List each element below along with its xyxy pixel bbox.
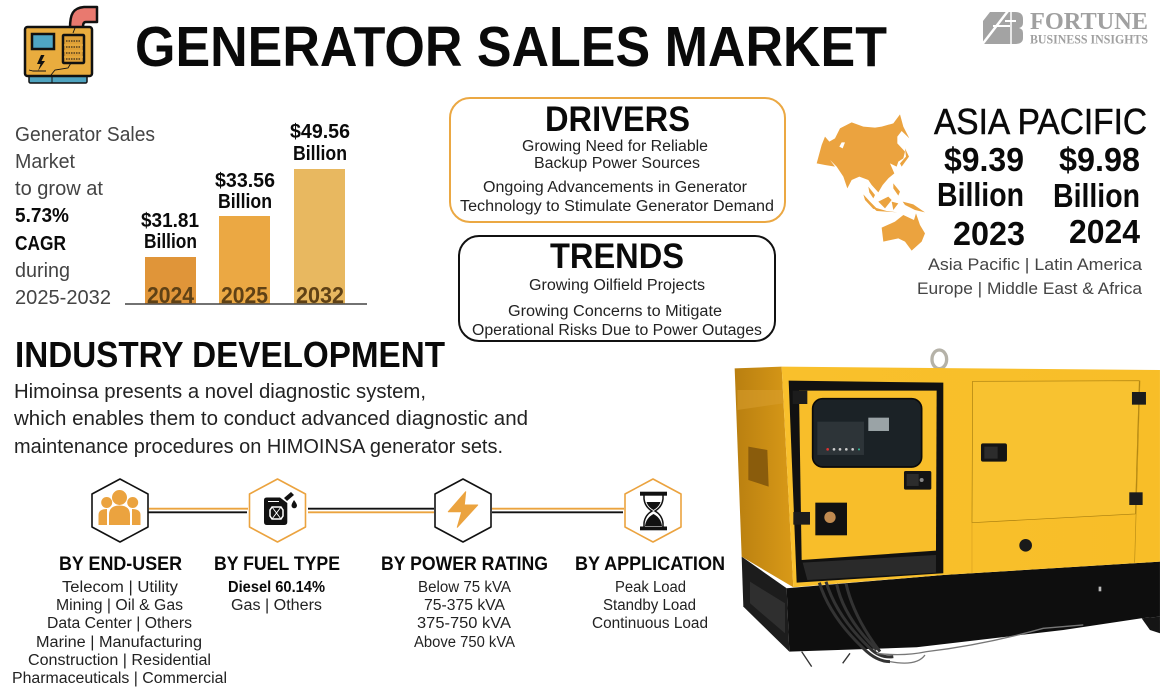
segment: by fuel type: Gas | Others <box>231 597 322 614</box>
bar: 2024 <box>141 210 199 308</box>
logo: Fortune Business Insights: FORTUNE <box>1030 8 1148 35</box>
panel: drivers: Technology to Stimulate Generator Demand <box>460 198 774 215</box>
connector lines <box>148 509 624 512</box>
segment: by application: BY APPLICATION <box>575 553 725 575</box>
panel: Asia Pacific values <box>917 101 1147 298</box>
panel: drivers: DRIVERS <box>545 100 690 139</box>
value: 2024: $9.98 <box>1059 141 1140 178</box>
segment: by end-user: BY END-USER <box>59 553 182 575</box>
text: CAGR statement: 2025-2032 <box>15 287 111 309</box>
segment: by power rating <box>381 553 548 651</box>
panel: trends <box>459 236 775 341</box>
panel: trends: Growing Oilfield Projects <box>529 277 705 294</box>
segment: by end-user: Telecom | Utility <box>62 579 178 596</box>
segment: by end-user: Data Center | Others <box>47 615 192 632</box>
icon: fuel can <box>250 479 306 542</box>
icon: hourglass <box>625 479 681 542</box>
value: 2024 <box>1053 141 1141 250</box>
heading: industry development: INDUSTRY DEVELOPMENT <box>15 334 445 375</box>
text: CAGR statement: during <box>15 260 70 282</box>
text: CAGR statement: CAGR <box>15 233 66 255</box>
text: industry development: Himoinsa presents a novel diagnostic system, <box>14 381 426 403</box>
photo: yellow generator set <box>735 350 1160 667</box>
segment: by end-user: Mining | Oil & Gas <box>56 597 183 614</box>
text: industry development: which enables them to conduct advanced diagnostic and <box>13 408 528 430</box>
segment: by end-user <box>12 553 227 687</box>
text: industry development <box>13 381 528 458</box>
value: 2023 <box>937 141 1025 252</box>
panel: Asia Pacific values: ASIA PACIFIC <box>934 101 1147 142</box>
value: 2023: 2023 <box>953 215 1025 252</box>
panel: drivers: Ongoing Advancements in Generator <box>483 179 747 196</box>
text: CAGR statement <box>15 124 155 309</box>
value: 2023: $9.39 <box>944 141 1024 178</box>
segment: by end-user: Marine | Manufacturing <box>36 634 202 651</box>
segment: by application: Peak Load <box>615 579 686 596</box>
panel: trends: TRENDS <box>550 237 684 276</box>
bar: 2024: 2024 <box>147 282 194 308</box>
text: CAGR statement: 5.73% <box>15 205 69 227</box>
panel: drivers: Growing Need for Reliable <box>522 138 708 155</box>
panel: trends: Operational Risks Due to Power Outages <box>472 322 762 339</box>
bar: 2024: Billion <box>144 231 197 253</box>
value: 2023: Billion <box>937 176 1024 213</box>
segment: by end-user: Construction | Residential <box>28 652 211 669</box>
segment: by power rating: 75-375 kVA <box>424 597 506 614</box>
logo: Fortune Business Insights <box>981 8 1148 46</box>
icon: lightning bolt <box>435 479 491 542</box>
segment: by power rating: 375-750 kVA <box>417 615 512 632</box>
panel: Asia Pacific values: Asia Pacific | Latin America <box>928 255 1143 274</box>
bar: 2032: 2032 <box>296 282 344 308</box>
segment: by fuel type: BY FUEL TYPE <box>214 553 340 575</box>
bar: 2032: $49.56 <box>290 121 350 143</box>
value: 2024: Billion <box>1053 177 1140 214</box>
text: CAGR statement: to grow at <box>15 178 103 200</box>
segment: by fuel type: Diesel 60.14% <box>228 579 325 596</box>
bar: 2032: Billion <box>293 143 347 165</box>
bar: 2025: 2025 <box>221 282 268 308</box>
segment: by power rating: Above 750 kVA <box>414 634 516 651</box>
panel: trends: Growing Concerns to Mitigate <box>508 303 722 320</box>
text: CAGR statement: Market <box>15 151 75 173</box>
panel: Asia Pacific values: Europe | Middle East & Africa <box>917 279 1143 298</box>
segment: by power rating: Below 75 kVA <box>418 579 512 596</box>
bar chart: market size <box>125 121 367 308</box>
segment: by fuel type <box>214 553 340 614</box>
icon: generator <box>25 7 97 83</box>
segment: by end-user: Pharmaceuticals | Commercial <box>12 670 227 687</box>
panel: drivers <box>450 98 785 222</box>
logo: Fortune Business Insights: BUSINESS INSIGHTS <box>1030 32 1148 46</box>
panel: drivers: Backup Power Sources <box>534 155 700 172</box>
text: industry development: maintenance procedures on HIMOINSA generator sets. <box>14 436 503 458</box>
map: Asia Pacific <box>817 114 925 251</box>
title: GENERATOR SALES MARKET <box>135 15 887 79</box>
segment: by application <box>575 553 725 632</box>
bar: 2025 <box>215 170 275 308</box>
icon: end-user people <box>92 479 148 542</box>
text: CAGR statement: Generator Sales <box>15 124 155 146</box>
bar: 2024: $31.81 <box>141 210 199 232</box>
bar: 2032 <box>290 121 350 308</box>
bar: 2025: Billion <box>218 191 272 213</box>
segment: by application: Standby Load <box>603 597 696 614</box>
bar: 2025: $33.56 <box>215 170 275 192</box>
segment: by application: Continuous Load <box>592 615 708 632</box>
value: 2024: 2024 <box>1069 213 1141 250</box>
segment: by power rating: BY POWER RATING <box>381 553 548 575</box>
